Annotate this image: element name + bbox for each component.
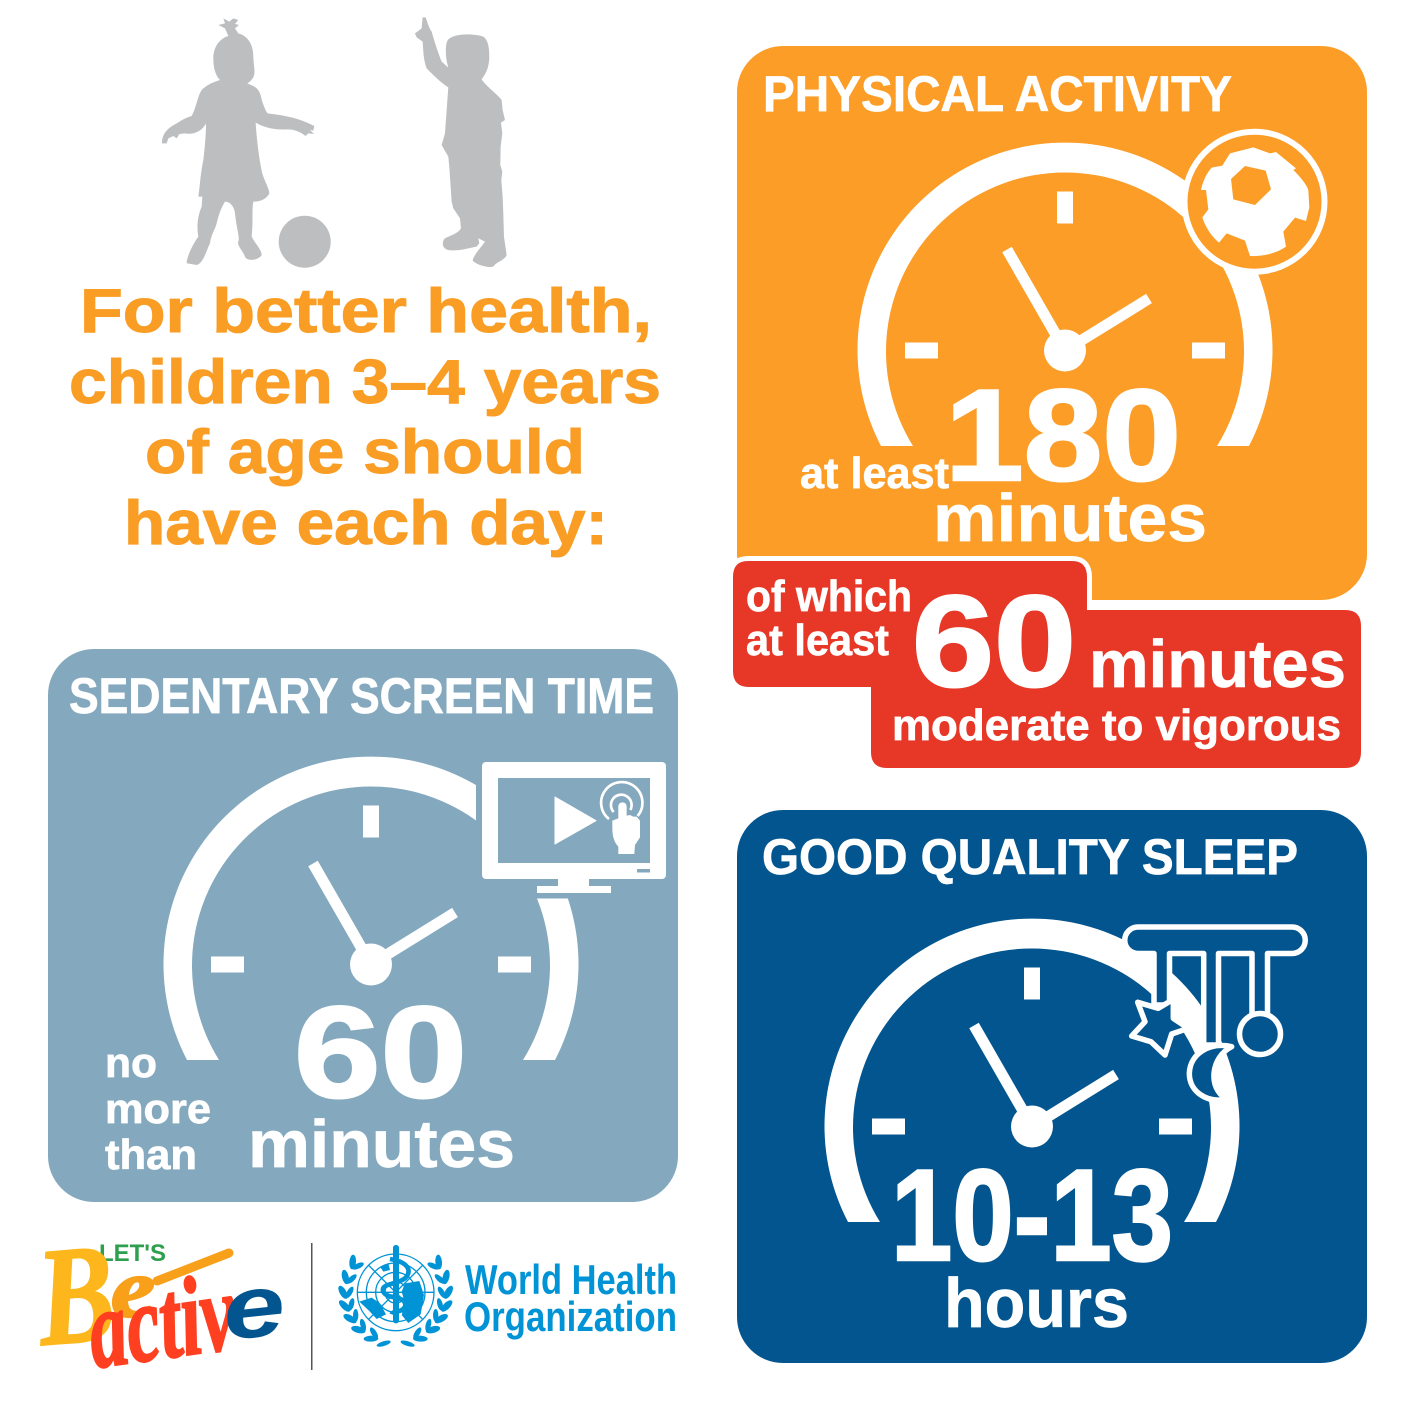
title: for better health xyxy=(69,277,661,558)
logo text: world health organization: World Health xyxy=(465,1256,677,1303)
icon: boy silhouette xyxy=(415,17,507,267)
panel background: orange xyxy=(737,46,1367,600)
title: for better health: have each day: xyxy=(124,489,608,558)
title: for better health: of age should xyxy=(145,418,585,487)
heading: sedentary screen time: SEDENTARY SCREEN TIME xyxy=(69,668,654,724)
panel background: navy xyxy=(737,810,1367,1363)
callout background: red xyxy=(733,561,1361,768)
clock: sleep xyxy=(824,919,1240,1222)
logo text: world health organization xyxy=(464,1256,677,1340)
panel: good quality sleep xyxy=(737,810,1367,1363)
heading: physical activity: PHYSICAL ACTIVITY xyxy=(763,66,1232,122)
logo: let's be active: e xyxy=(218,1254,290,1359)
label: no more than: no xyxy=(105,1039,157,1086)
logo: let's be active: activ xyxy=(80,1250,243,1393)
callout: moderate to vigorous xyxy=(733,561,1361,768)
panel: physical activity xyxy=(737,46,1367,600)
label: of which at least: of which xyxy=(746,572,912,621)
clock: screen time xyxy=(163,756,672,1060)
illustration: children silhouettes with ball xyxy=(162,17,507,268)
label: minutes: minutes xyxy=(933,481,1207,556)
label: no more than xyxy=(105,1039,211,1178)
logo: let's be active: LET'S xyxy=(99,1240,166,1267)
label: no more than: than xyxy=(105,1131,197,1178)
label: minutes: minutes xyxy=(1089,627,1346,702)
label: minutes: minutes xyxy=(248,1107,515,1182)
number: 10-13: 10-13 xyxy=(891,1142,1173,1288)
label: no more than: more xyxy=(105,1085,211,1132)
label: of which at least: at least xyxy=(746,616,889,665)
panel background: steel blue xyxy=(48,649,678,1202)
panel: sedentary screen time xyxy=(48,649,678,1202)
title: for better health: For better health, xyxy=(80,277,652,346)
number: 60: 60 xyxy=(912,568,1076,714)
logo: WHO emblem xyxy=(336,1245,455,1348)
number: 60: 60 xyxy=(294,979,467,1125)
icon: soccer ball xyxy=(1184,132,1324,272)
clock: physical activity xyxy=(858,143,1272,446)
icon: girl silhouette xyxy=(162,18,314,265)
label: hours: hours xyxy=(944,1264,1129,1342)
logo: let's be active: e xyxy=(106,1241,159,1336)
title: for better health: children 3–4 years xyxy=(69,348,661,417)
logo text: world health organization: Organization xyxy=(464,1293,677,1340)
heading: good quality sleep: GOOD QUALITY SLEEP xyxy=(762,829,1298,885)
label: moderate to vigorous: moderate to vigorous xyxy=(892,701,1341,750)
number: 180: 180 xyxy=(945,362,1181,508)
label: of which at least xyxy=(746,572,912,665)
logo: let's be active: B xyxy=(30,1215,120,1376)
label: at least: at least xyxy=(800,449,949,498)
icon: baby mobile with star, moon and circle xyxy=(1125,927,1305,1100)
icon: ball xyxy=(279,216,331,268)
icon: television with touch xyxy=(482,762,666,893)
logo: let's be active xyxy=(30,1215,290,1393)
